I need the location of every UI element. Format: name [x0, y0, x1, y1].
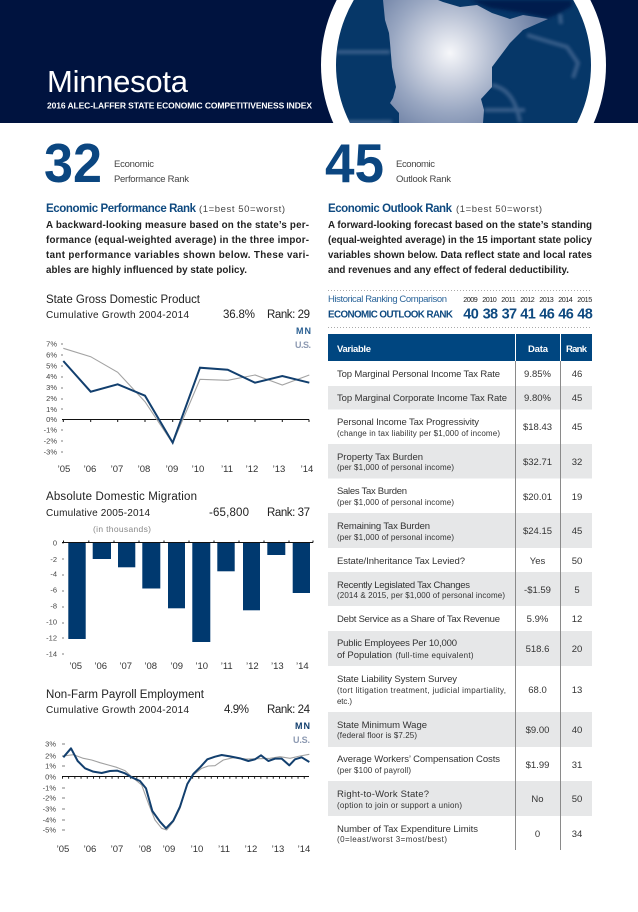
row: state liability system survey [328, 666, 592, 712]
years: 2011 [501, 295, 516, 304]
y axis labels: -12 [46, 634, 57, 642]
row: debt service: 5.9% [527, 614, 549, 625]
outlook heading: Economic Outlook Rank [328, 203, 453, 215]
row: debt service: 12 [572, 614, 582, 625]
chart: non-farm payroll employment [43, 689, 311, 855]
x axis years: ’12 [245, 844, 257, 855]
U.S. line [63, 754, 309, 830]
row: state minimum wage [328, 712, 592, 747]
row: public employees: Public Employees Per 10,000 [337, 638, 457, 649]
row: recently legislated tax changes: -$1.59 [524, 585, 551, 596]
GDP rank: Rank: 29 [267, 309, 310, 321]
y axis labels: 4% [46, 372, 57, 381]
x axis years: ’06 [94, 661, 107, 672]
x axis years: ’13 [272, 844, 284, 855]
row: top marginal corporate income tax rate: 9.80% [524, 393, 552, 404]
row: state liability system survey: etc.) [337, 697, 352, 706]
x axis years: ’13 [271, 661, 284, 672]
x axis years: ’05 [57, 844, 69, 855]
panel: economic performance rank [44, 132, 309, 276]
row: estate/inheritance tax levied: Estate/Inheritance Tax Levied? [337, 556, 465, 567]
x axis years [57, 844, 310, 855]
x axis years: ’12 [246, 464, 258, 475]
row: public employees: (full-time equivalent) [396, 651, 474, 660]
y axis labels: 1% [46, 405, 57, 414]
GDP value: 36.8% [223, 309, 255, 321]
row: property tax burden: (per $1,000 of personal income) [337, 463, 454, 472]
x axis years: ’06 [84, 844, 96, 855]
panel: economic outlook rank [325, 132, 593, 276]
x axis years: ’11 [218, 844, 230, 855]
rank label: Economic [114, 159, 154, 170]
row: right-to-work state: Right-to-Work State? [337, 789, 429, 800]
row: average workers' compensation costs: $1.99 [526, 760, 549, 771]
outlook heading [328, 203, 542, 215]
x axis years [69, 661, 309, 672]
row: average workers' compensation costs [328, 747, 592, 781]
row: top marginal personal income tax rate [328, 361, 592, 386]
y axis labels: -2% [44, 436, 57, 446]
chart title: Non-Farm Payroll Employment [46, 689, 205, 701]
x axis years: ’14 [298, 844, 310, 855]
row: right-to-work state: (option to join or support a union) [337, 801, 462, 810]
historical ranks: 46 [558, 306, 574, 322]
table header: Rank [566, 344, 588, 355]
years [463, 295, 592, 304]
legend: U.S. [295, 340, 311, 350]
x axis years: ’05 [58, 464, 70, 475]
row: recently legislated tax changes: 5 [574, 585, 580, 596]
row: public employees: of Population [337, 650, 392, 661]
employment value: 4.9% [224, 704, 249, 716]
x axis years: ’09 [163, 844, 175, 855]
x axis years: ’10 [191, 844, 203, 855]
y axis labels: -2 [50, 555, 57, 564]
row: sales tax burden: (per $1,000 of personal income) [337, 498, 454, 507]
x axis years: ’11 [221, 464, 233, 475]
y axis labels: -4% [43, 816, 56, 824]
state outline of Minnesota [383, 0, 548, 123]
x axis years: ’12 [246, 661, 259, 672]
row: personal income tax progressivity: $18.43 [523, 422, 552, 433]
chart subtitle: Cumulative Growth 2004-2014 [46, 310, 189, 321]
performance description: ables are highly influenced by state policy. [46, 265, 247, 276]
performance description: formance (equal-weighted average) in the three impor- [46, 235, 309, 246]
row: top marginal corporate income tax rate [328, 386, 592, 410]
y axis labels: 0% [45, 772, 56, 782]
y axis labels: -4 [50, 570, 57, 578]
row: remaining tax burden: 45 [572, 526, 582, 537]
state title: Minnesota [47, 64, 189, 99]
y axis labels: 0% [46, 415, 57, 424]
row: public employees: 518.6 [526, 644, 549, 655]
performance description: A backward-looking measure based on the state’s per- [46, 220, 309, 231]
rank label [114, 159, 189, 185]
historical ranks: 40 [463, 306, 479, 322]
y axis labels: -3% [43, 804, 56, 814]
row: estate/inheritance tax levied: 50 [572, 556, 582, 567]
outlook description: and revenues and any effect of federal deductibility. [328, 265, 569, 276]
row: personal income tax progressivity: 45 [572, 422, 582, 433]
x axis years: ’07 [119, 661, 132, 672]
x axis years: ’11 [221, 661, 233, 672]
table header: Data [528, 344, 549, 355]
rank label [396, 159, 451, 185]
y axis labels: -1% [44, 426, 57, 434]
rank label: Outlook Rank [396, 174, 451, 185]
row: right-to-work state: 50 [572, 794, 582, 805]
x axis years [58, 464, 313, 475]
row: debt service [328, 606, 592, 631]
legend [295, 326, 311, 350]
rank number 45: 45 [325, 132, 384, 194]
row: state minimum wage: 40 [572, 725, 582, 736]
map medallion [321, 0, 606, 123]
row: sales tax burden: Sales Tax Burden [337, 486, 407, 497]
row: remaining tax burden [328, 513, 592, 548]
outlook heading: (1=best 50=worst) [456, 204, 542, 215]
x axis years: ’09 [166, 464, 178, 475]
row: state liability system survey: 13 [572, 685, 582, 696]
y axis labels: 2% [45, 752, 56, 760]
x axis years: ’14 [296, 661, 309, 672]
y axis labels: 5% [46, 362, 57, 370]
row: average workers' compensation costs: 31 [572, 760, 582, 771]
x axis years: ’10 [192, 464, 204, 475]
x axis years: ’08 [138, 464, 150, 475]
row: recently legislated tax changes [328, 572, 592, 606]
y axis labels: -2% [43, 794, 56, 802]
row: property tax burden: $32.71 [523, 457, 552, 468]
MN line [63, 361, 309, 443]
MN line [63, 748, 309, 828]
row: personal income tax progressivity: (change in tax liability per $1,000 of income) [337, 429, 500, 438]
historical ranks [463, 306, 593, 322]
row: sales tax burden: 19 [572, 492, 582, 503]
x axis years: ’14 [301, 464, 313, 475]
row: number of tax expenditure limits: 34 [572, 829, 582, 840]
y axis labels: -1% [43, 784, 56, 792]
row: property tax burden: Property Tax Burden [337, 452, 423, 463]
historical ranks: 38 [483, 306, 498, 322]
y axis labels: -8 [50, 602, 57, 610]
row: remaining tax burden: Remaining Tax Burden [337, 521, 430, 532]
row: sales tax burden [328, 478, 592, 513]
row: top marginal corporate income tax rate: Top Marginal Corporate Income Tax Rate [337, 393, 507, 404]
performance heading: Economic Performance Rank [46, 203, 197, 215]
row: state minimum wage: State Minimum Wage [337, 720, 427, 731]
outlook description: A forward-looking forecast based on the state’s standing [328, 220, 592, 231]
years: 2014 [558, 295, 573, 304]
row: number of tax expenditure limits: 0 [535, 829, 540, 840]
performance description [46, 220, 309, 276]
row: number of tax expenditure limits [328, 816, 592, 850]
U.S. line [63, 348, 309, 443]
y axis labels: 7% [46, 340, 57, 348]
years: 2009 [463, 295, 478, 304]
historical label: Historical Ranking Comparison [328, 294, 447, 305]
row: remaining tax burden: (per $1,000 of personal income) [337, 533, 454, 542]
rank number 32: 32 [44, 132, 102, 194]
outlook description: (equal-weighted average) in the 15 important state policy [328, 235, 593, 246]
y axis labels: 6% [46, 350, 57, 360]
years: 2010 [482, 295, 497, 304]
employment rank: Rank: 24 [267, 704, 311, 716]
chart subtitle: Cumulative 2005-2014 [46, 508, 150, 519]
y axis labels: 2% [46, 394, 57, 403]
unit note: (in thousands) [93, 524, 151, 534]
header banner [0, 0, 638, 123]
y axis labels [46, 538, 57, 658]
migration rank: Rank: 37 [267, 507, 310, 519]
row: state liability system survey: State Liability System Survey [337, 674, 457, 685]
row: recently legislated tax changes: Recently Legislated Tax Changes [337, 580, 470, 591]
legend: MN [295, 721, 310, 731]
performance heading [46, 203, 285, 215]
y axis labels: -14 [46, 650, 57, 658]
row: personal income tax progressivity [328, 410, 592, 444]
row: number of tax expenditure limits: Number of Tax Expenditure Limits [337, 824, 478, 835]
rank label: Performance Rank [114, 174, 189, 185]
y axis labels: -5% [43, 826, 56, 834]
y axis labels: 1% [45, 762, 56, 770]
migration value: -65,800 [209, 507, 249, 519]
rank label: Economic [396, 159, 435, 170]
x axis years: ’05 [69, 661, 82, 672]
row: state liability system survey: (tort litigation treatment, judicial impartiality, [337, 686, 506, 695]
row: public employees [328, 631, 592, 666]
y axis labels: 3% [45, 740, 56, 748]
y axis labels: -3% [44, 448, 57, 456]
row: average workers' compensation costs: Average Workers’ Compensation Costs [337, 754, 500, 765]
y axis labels: 3% [46, 383, 57, 392]
table header: Variable [337, 344, 371, 355]
row: average workers' compensation costs: (per $100 of payroll) [337, 766, 411, 775]
row: recently legislated tax changes: (2014 & 2015, per $1,000 of personal income) [337, 591, 505, 600]
years: 2015 [577, 295, 592, 304]
row: top marginal personal income tax rate: 46 [572, 369, 582, 380]
row: remaining tax burden: $24.15 [523, 526, 552, 537]
row: number of tax expenditure limits: (0=least/worst 3=most/best) [337, 835, 447, 844]
x axis years: ’07 [111, 464, 123, 475]
legend: U.S. [293, 735, 310, 745]
row: estate/inheritance tax levied: Yes [530, 556, 545, 567]
y axis labels: 0 [53, 538, 57, 548]
outlook description [328, 220, 593, 276]
years: 2013 [539, 295, 554, 304]
x axis years: ’10 [195, 661, 208, 672]
row: state minimum wage: (federal floor is $7.25) [337, 731, 417, 740]
historical ranks: 46 [539, 306, 555, 322]
x axis years: ’08 [139, 844, 151, 855]
x axis years: ’07 [111, 844, 123, 855]
row: state liability system survey: 68.0 [528, 685, 547, 696]
row: right-to-work state: No [531, 794, 544, 805]
historical ranks: 41 [520, 306, 536, 322]
row: estate/inheritance tax levied [328, 548, 592, 572]
x axis years: ’06 [84, 464, 96, 475]
legend [293, 721, 310, 745]
row: public employees: 20 [572, 644, 582, 655]
chart title: State Gross Domestic Product [46, 294, 201, 306]
row: right-to-work state [328, 781, 592, 816]
chart: state gross domestic product [44, 294, 313, 475]
y axis labels: -6 [50, 586, 57, 594]
legend: MN [296, 326, 311, 336]
years: 2012 [520, 295, 535, 304]
index subtitle: 2016 ALEC-LAFFER STATE ECONOMIC COMPETITIVENESS INDEX [47, 100, 312, 110]
x axis years: ’08 [144, 661, 157, 672]
x axis years: ’09 [170, 661, 183, 672]
y axis labels [44, 340, 57, 456]
outlook rank row label: ECONOMIC OUTLOOK RANK [328, 310, 453, 320]
performance description: tant performance variables shown below. These vari- [46, 250, 309, 261]
table: policy variables [328, 334, 592, 850]
historical ranking comparison [328, 294, 593, 322]
row: debt service: Debt Service as a Share of Tax Revenue [337, 614, 500, 625]
row: state minimum wage: $9.00 [526, 725, 549, 736]
chart subtitle: Cumulative Growth 2004-2014 [46, 705, 189, 716]
row: sales tax burden: $20.01 [523, 492, 552, 503]
row: property tax burden [328, 444, 592, 478]
chart: absolute domestic migration [46, 491, 313, 672]
performance heading: (1=best 50=worst) [199, 204, 285, 215]
row: top marginal personal income tax rate: Top Marginal Personal Income Tax Rate [337, 369, 500, 380]
historical ranks: 37 [502, 306, 517, 322]
y axis labels [43, 740, 56, 834]
outlook description: variables shown below. Data reflect state and local rates [328, 250, 593, 261]
x axis years: ’13 [273, 464, 285, 475]
y axis labels: -10 [46, 618, 57, 626]
row: property tax burden: 32 [572, 457, 582, 468]
table header [328, 334, 592, 361]
bars [68, 542, 310, 642]
chart title: Absolute Domestic Migration [46, 491, 197, 503]
historical ranks: 48 [577, 306, 593, 322]
row: top marginal corporate income tax rate: 45 [572, 393, 582, 404]
row: personal income tax progressivity: Personal Income Tax Progressivity [337, 417, 479, 428]
row: top marginal personal income tax rate: 9.85% [524, 369, 552, 380]
